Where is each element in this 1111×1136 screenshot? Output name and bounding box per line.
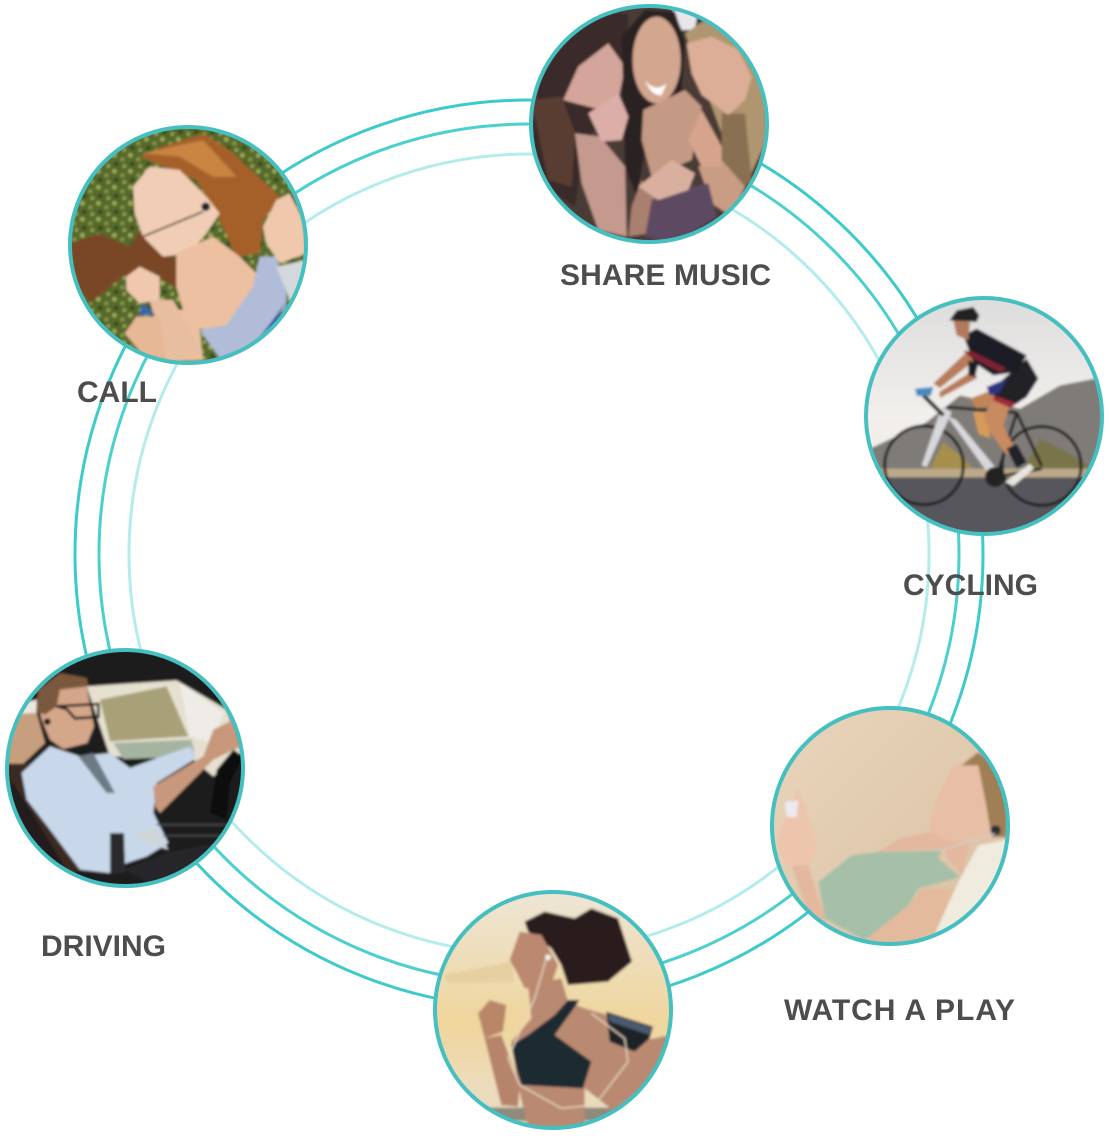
label: cycling: CYCLING xyxy=(903,569,1038,602)
label: call: CALL xyxy=(77,376,157,409)
photo: watch a play xyxy=(765,702,1015,952)
label: watch a play: WATCH A PLAY xyxy=(784,994,1016,1027)
label: share music: SHARE MUSIC xyxy=(560,259,771,292)
photo: cycling xyxy=(860,292,1110,544)
photo: share music xyxy=(525,0,775,250)
photo: call xyxy=(63,120,313,370)
photo: driving xyxy=(0,643,250,893)
concentric rings xyxy=(75,100,983,1008)
label: driving: DRIVING xyxy=(41,930,166,963)
photo: running xyxy=(428,885,678,1135)
